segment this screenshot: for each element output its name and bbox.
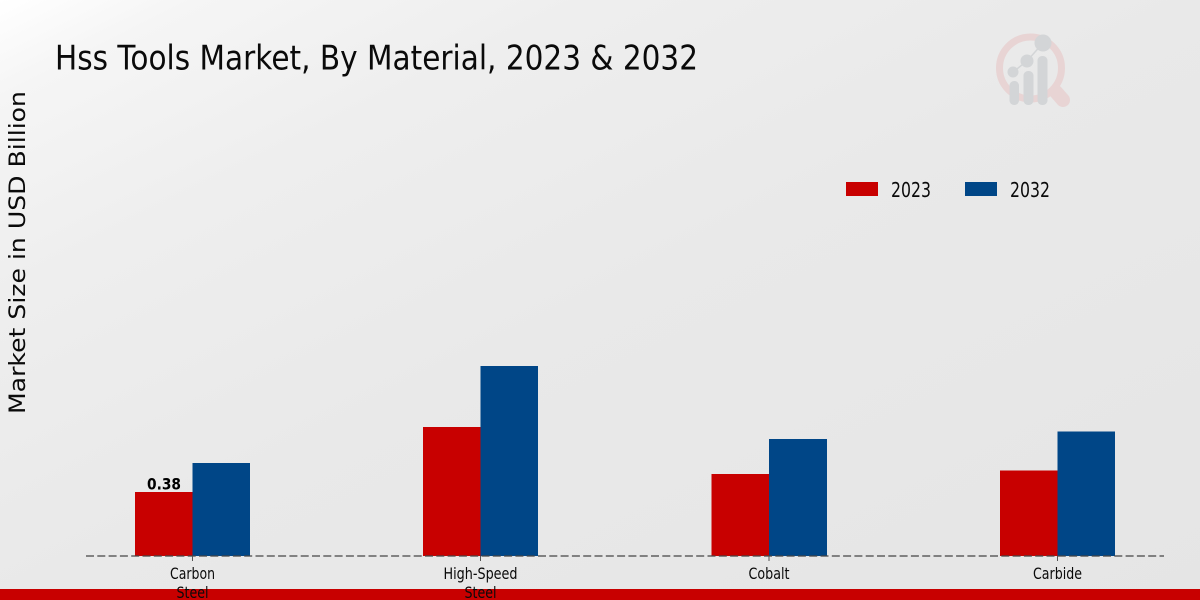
bar chart	[86, 366, 1164, 600]
bars: High-Speed Steel	[423, 366, 538, 556]
watermark logo	[1000, 34, 1063, 105]
legend swatch: 2023	[846, 182, 878, 196]
category label: Carbide: Carbide	[1033, 564, 1082, 583]
category label: Carbon Steel	[170, 564, 215, 600]
category label: Carbon Steel: Carbon	[170, 564, 215, 583]
bars: Carbon Steel	[135, 463, 250, 556]
y-axis label: Market Size in USD Billion	[5, 91, 31, 414]
bottom band	[0, 589, 1200, 600]
legend swatch: 2032	[965, 182, 997, 196]
category label: High-Speed Steel	[444, 564, 518, 600]
value label: 0.38	[147, 474, 181, 494]
legend label: 2032: 2032	[1010, 178, 1050, 202]
bars: Carbide	[1000, 432, 1115, 556]
bars: Cobalt	[712, 439, 827, 556]
category label: High-Speed Steel: High-Speed	[444, 564, 518, 583]
title: Hss Tools Market, By Material, 2023 & 2032	[55, 38, 698, 78]
legend	[846, 178, 1050, 202]
legend label: 2023: 2023	[891, 178, 931, 202]
category label: Cobalt: Cobalt	[748, 564, 790, 583]
